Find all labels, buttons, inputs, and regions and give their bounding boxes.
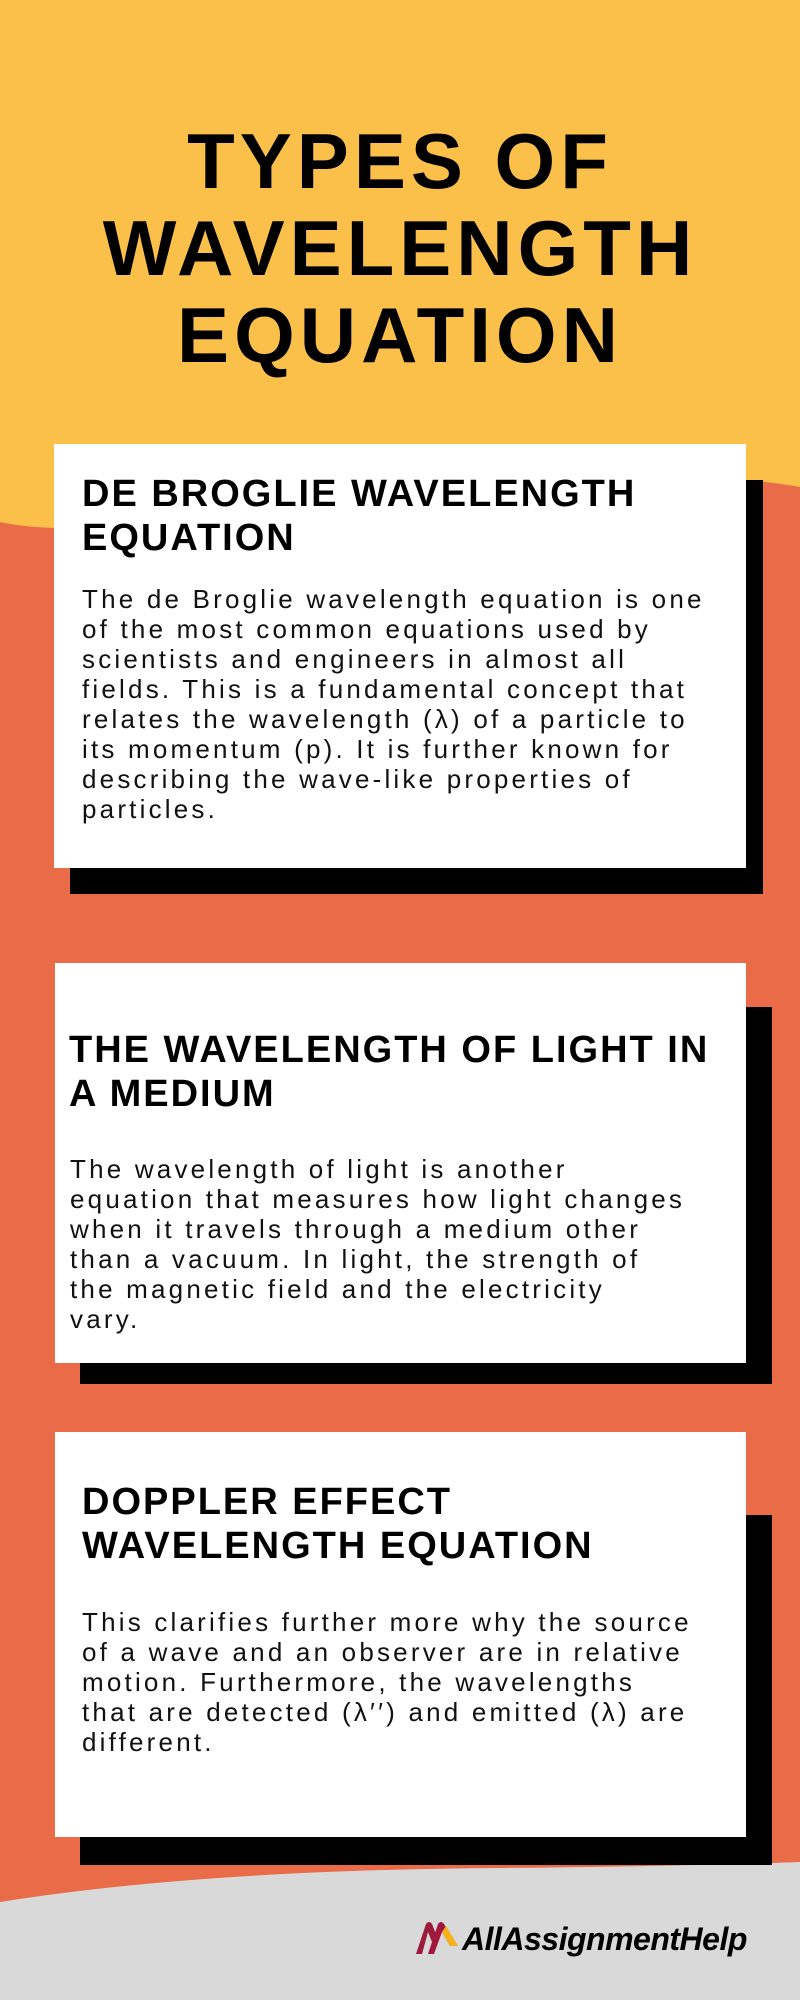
text: de Broglie: its momentum (p). It is further known for — [82, 734, 673, 764]
heading: light in a medium — [69, 1029, 709, 1115]
text: de Broglie: describing the wave-like properties of — [82, 764, 633, 794]
text: light in a medium: The wavelength of light is another — [70, 1154, 568, 1184]
heading: de Broglie: DE BROGLIE WAVELENGTH — [82, 473, 636, 515]
text: light in a medium: than a vacuum. In light, the strength of — [70, 1244, 640, 1274]
panel: de Broglie — [54, 444, 763, 894]
heading: Doppler: DOPPLER EFFECT — [82, 1481, 452, 1523]
title: WAVELENGTH — [103, 204, 697, 292]
logo — [416, 1921, 747, 1957]
panel: light in a medium — [55, 963, 772, 1384]
title: EQUATION — [177, 291, 623, 379]
text: Doppler — [82, 1607, 692, 1757]
text: light in a medium: when it travels through a medium other — [70, 1214, 641, 1244]
heading: light in a medium: THE WAVELENGTH OF LIGHT IN — [69, 1029, 709, 1071]
text: light in a medium — [70, 1154, 685, 1334]
text: light in a medium: the magnetic field and the electricity — [70, 1274, 605, 1304]
text: logo: AllAssignmentHelp — [462, 1921, 747, 1957]
heading: de Broglie: EQUATION — [82, 517, 296, 559]
title — [102, 117, 697, 379]
text: Doppler: that are detected (λ′′) and emitted (λ) are — [82, 1697, 687, 1727]
text: Doppler: motion. Furthermore, the wavelengths — [82, 1667, 635, 1697]
text: light in a medium: vary. — [70, 1304, 140, 1334]
text: de Broglie: The de Broglie wavelength equation is one — [82, 584, 705, 614]
text: light in a medium: equation that measures how light changes — [70, 1184, 685, 1214]
heading: de Broglie — [82, 473, 636, 559]
heading: light in a medium: A MEDIUM — [69, 1073, 276, 1115]
panel: Doppler effect — [55, 1432, 772, 1865]
text: Doppler: This clarifies further more why the source — [82, 1607, 692, 1637]
heading: Doppler — [82, 1481, 594, 1567]
text: Doppler: of a wave and an observer are in relative — [82, 1637, 683, 1667]
text: Doppler: different. — [82, 1727, 215, 1757]
text: de Broglie: particles. — [82, 794, 218, 824]
text: de Broglie — [82, 584, 705, 824]
heading: Doppler: WAVELENGTH EQUATION — [82, 1525, 594, 1567]
text: de Broglie: scientists and engineers in almost all — [82, 644, 627, 674]
title: TYPES OF — [187, 117, 613, 205]
text: de Broglie: fields. This is a fundamental concept that — [82, 674, 687, 704]
icon: logo mark — [416, 1922, 458, 1954]
text: de Broglie: of the most common equations used by — [82, 614, 651, 644]
text: de Broglie: relates the wavelength (λ) of a particle to — [82, 704, 688, 734]
